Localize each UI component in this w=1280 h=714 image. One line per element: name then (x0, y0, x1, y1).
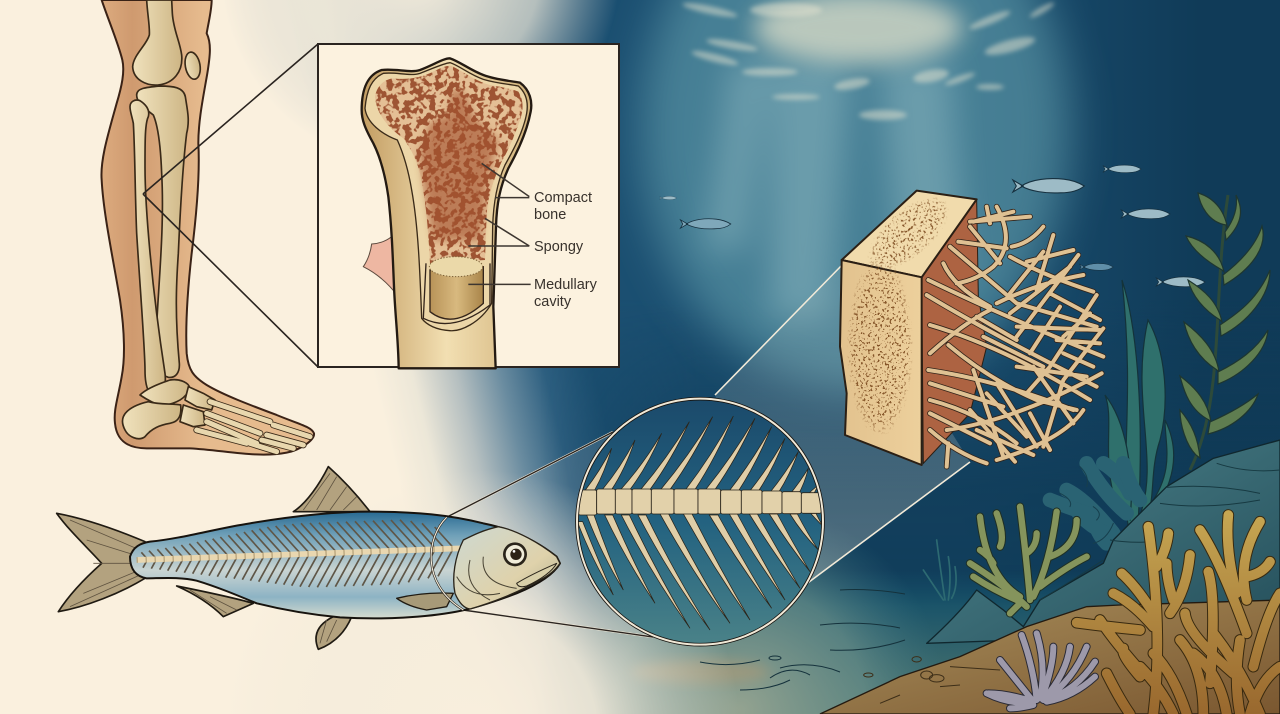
spongy bone base (375, 66, 523, 263)
purple anemone (987, 633, 1095, 708)
pectoral fin (397, 593, 453, 610)
kelp: left seaweed (1105, 280, 1174, 525)
callout lines from leg (143, 44, 318, 367)
lens: magnified fish spine (577, 399, 823, 645)
upper ribs (585, 416, 818, 497)
distant fish school (660, 165, 1205, 287)
top porous texture (855, 183, 962, 283)
dorsal fin (293, 467, 370, 512)
femur (133, 0, 182, 85)
foot rays (197, 402, 310, 452)
tarsal bones (180, 405, 205, 427)
zoom beam: fish to lens (447, 432, 653, 637)
label: medullary cavity: Medullary (534, 277, 597, 293)
trabecular strands (927, 207, 1103, 467)
leg anatomy (101, 0, 314, 455)
fin rays (70, 473, 357, 643)
cut face cream (365, 63, 527, 331)
vertebrae (578, 489, 821, 515)
pelvic fin (177, 586, 253, 617)
background coral (1050, 463, 1140, 543)
cut face (922, 200, 987, 463)
bone outer (362, 58, 531, 368)
seafloor foreground (820, 440, 1280, 714)
head (454, 527, 560, 609)
periosteum flap (363, 237, 423, 350)
front porous texture (847, 257, 913, 437)
top face (842, 191, 977, 277)
panel: bone cross-section (318, 44, 619, 368)
medullary cylinder (430, 267, 483, 319)
seabed (466, 484, 1064, 714)
label: compact bone: Compact (534, 190, 592, 206)
sandy mound (820, 600, 1280, 714)
label: spongy: Spongy (534, 239, 584, 255)
rock (927, 440, 1280, 643)
kelp: right seaweed (1180, 193, 1270, 470)
anal fin (316, 617, 352, 649)
fibula (130, 100, 165, 397)
label: medullary cavity: cavity (534, 294, 572, 310)
front face (840, 260, 922, 465)
label: compact bone: bone (534, 207, 566, 223)
ribs and spine (137, 520, 462, 587)
trabecular bone block (840, 183, 1103, 467)
magnifier ring on fish (431, 517, 463, 610)
lower ribs (577, 513, 823, 630)
small seagrass (923, 540, 956, 600)
leg silhouette (101, 0, 314, 455)
patella (183, 51, 202, 80)
sunlight and water surface (640, 0, 1070, 390)
leader lines (468, 163, 531, 284)
eye (503, 542, 527, 566)
olive coral (970, 507, 1087, 613)
dense marrow core (420, 87, 498, 240)
spongy texture (376, 66, 522, 264)
sardine with visible skeleton (57, 467, 560, 649)
tail fin (57, 513, 145, 612)
tibia (137, 86, 188, 377)
body (130, 512, 560, 618)
zoom beam: lens to bone block (715, 262, 970, 585)
gold coral (1077, 515, 1280, 714)
calcaneus (123, 402, 181, 439)
talus (140, 380, 189, 406)
